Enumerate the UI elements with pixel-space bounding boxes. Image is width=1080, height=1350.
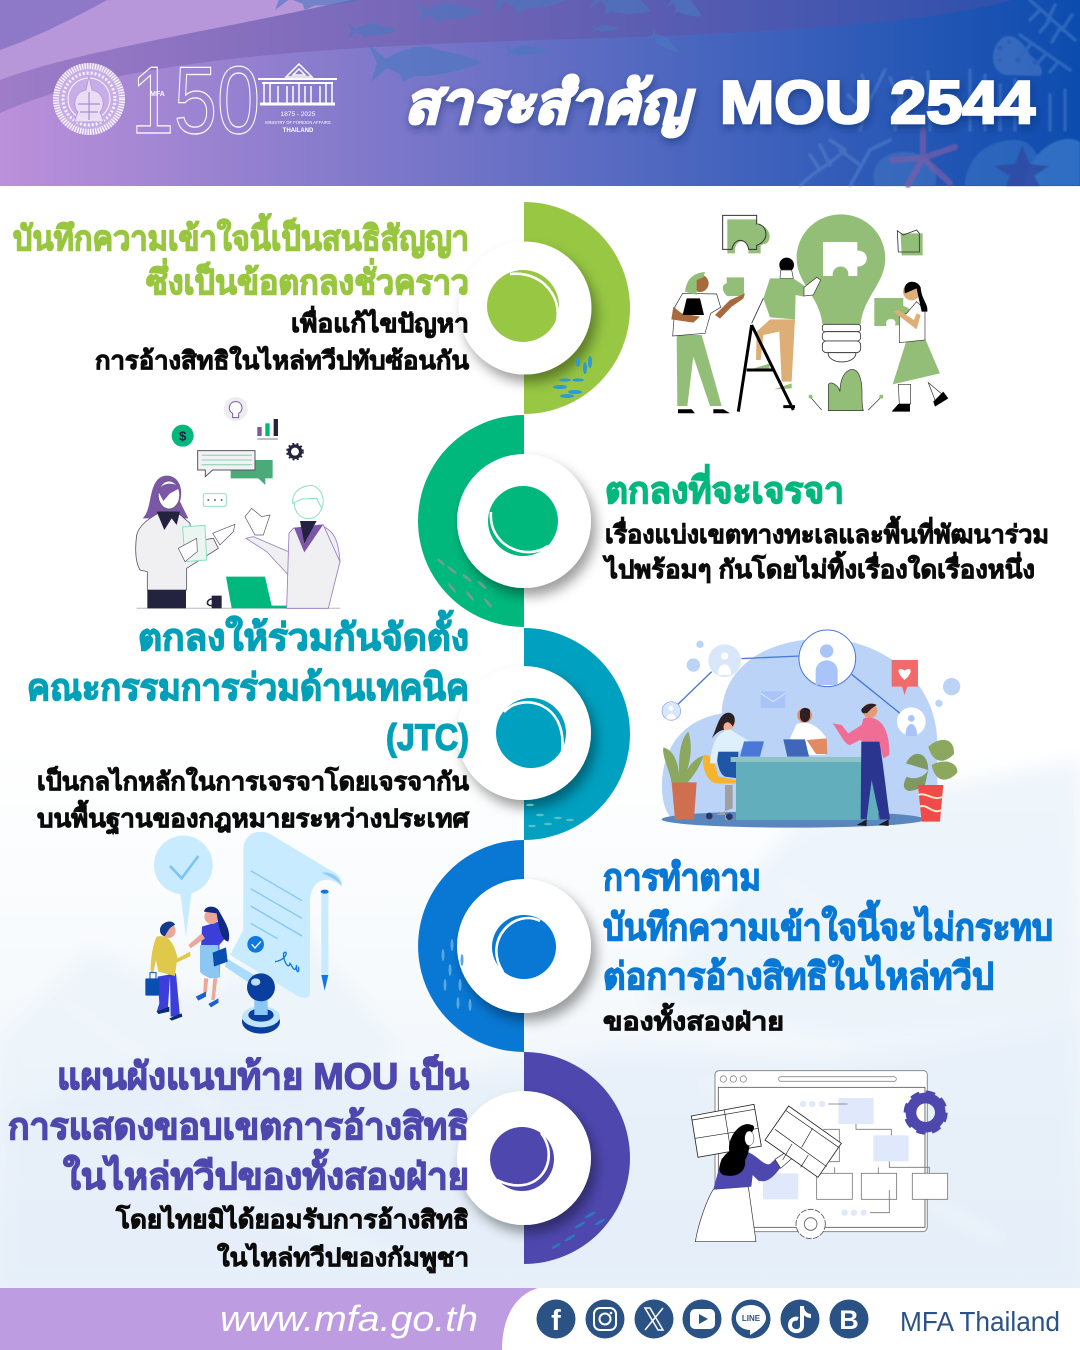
- icon: blockdit: B: [839, 1305, 859, 1335]
- logo: 150 anniversary: MFA: [150, 91, 165, 98]
- text block 1: การอ้างสิทธิในไหล่ทวีปทับซ้อนกัน: [95, 345, 469, 375]
- illustration 4: handshake and signed contract: [145, 832, 342, 1034]
- title: [404, 69, 1036, 138]
- social icons: [536, 1300, 868, 1338]
- text block 1: ซึ่งเป็นข้อตกลงชั่วคราว: [146, 258, 469, 302]
- text block 3: คณะกรรมการร่วมด้านเทคนิค: [27, 667, 469, 708]
- coral decoration: [800, 0, 1080, 186]
- text block 4: [603, 857, 1053, 1036]
- logo: ministry building: [258, 64, 337, 134]
- account name: MFA Thailand: [900, 1306, 1060, 1337]
- icon: facebook: [536, 1300, 576, 1338]
- icon: instagram: [586, 1300, 624, 1338]
- illustration 5: woman arranging a flow chart: [691, 1071, 948, 1242]
- ring 2: emerald: [418, 415, 591, 627]
- text block 5: แผนผังแนบท้าย MOU เป็น: [57, 1053, 469, 1097]
- text block 1: [13, 213, 469, 375]
- icon: x: [634, 1300, 674, 1338]
- text block 5: [8, 1053, 469, 1274]
- text block 5: ในไหล่ทวีปของกัมพูชา: [217, 1242, 469, 1274]
- icon: line: [732, 1300, 770, 1338]
- ring 5: indigo: [457, 1052, 630, 1264]
- text block 2: [602, 464, 1049, 584]
- text block 3: [27, 610, 470, 835]
- text block 3: เป็นกลไกหลักในการเจรจาโดยเจรจากัน: [37, 766, 469, 796]
- text block 1: บันทึกความเข้าใจนี้เป็นสนธิสัญญา: [13, 213, 469, 259]
- logo: ministry building: MINISTRY OF FOREIGN AFFAIRS: [265, 120, 331, 125]
- illustration 1: team with puzzle light bulb: [671, 214, 948, 413]
- text block 3: (JTC): [386, 717, 469, 758]
- text block 2: เรื่องแบ่งเขตทางทะเลและพื้นที่พัฒนาร่วม: [605, 515, 1049, 549]
- icon: youtube: [682, 1300, 722, 1338]
- logo: ministry building: 1875 - 2025: [281, 111, 316, 118]
- text block 5: ในไหล่ทวีปของทั้งสองฝ่าย: [63, 1149, 469, 1197]
- website url: www.mfa.go.th: [220, 1298, 478, 1339]
- text block 3: ตกลงให้ร่วมกันจัดตั้ง: [138, 610, 469, 658]
- logo: ministry building: THAILAND: [283, 128, 314, 134]
- icon: tiktok: [780, 1300, 820, 1338]
- ring 1: green: [458, 202, 630, 414]
- text block 4: ต่อการอ้างสิทธิในไหล่ทวีป: [603, 954, 994, 997]
- ring 4: blue: [418, 840, 591, 1052]
- illustration 3: office team at desk: [662, 630, 960, 828]
- text block 1: เพื่อแก้ไขปัญหา: [291, 306, 469, 338]
- title: MOU 2544: [720, 69, 1036, 136]
- text block 5: โดยไทยมิได้ยอมรับการอ้างสิทธิ: [115, 1204, 469, 1234]
- text block 2: ไปพร้อมๆ กันโดยไม่ทิ้งเรื่องใดเรื่องหนึ่ง: [602, 550, 1035, 584]
- text block 4: การทำตาม: [603, 857, 761, 898]
- header banner: [0, 0, 1080, 186]
- text block 5: การแสดงขอบเขตการอ้างสิทธิ: [8, 1106, 469, 1147]
- footer bar: [0, 1288, 1080, 1350]
- text block 3: บนพื้นฐานของกฎหมายระหว่างประเทศ: [37, 799, 470, 835]
- illustration 2: two colleagues talking: [136, 397, 340, 608]
- ring 3: teal: [457, 628, 630, 840]
- logo: royal seal: [53, 63, 125, 135]
- title: สาระสำคัญ: [404, 71, 696, 138]
- text block 4: ของทั้งสองฝ่าย: [603, 1002, 784, 1036]
- icon: facebook: f: [551, 1305, 561, 1337]
- icon: line: LINE: [742, 1314, 761, 1323]
- illustration 2: two colleagues talking: $: [179, 429, 187, 444]
- logo: 150 anniversary: 150: [131, 47, 260, 154]
- fish school: [273, 0, 706, 82]
- icon: blockdit: [830, 1300, 868, 1338]
- text block 2: ตกลงที่จะเจรจา: [605, 464, 844, 511]
